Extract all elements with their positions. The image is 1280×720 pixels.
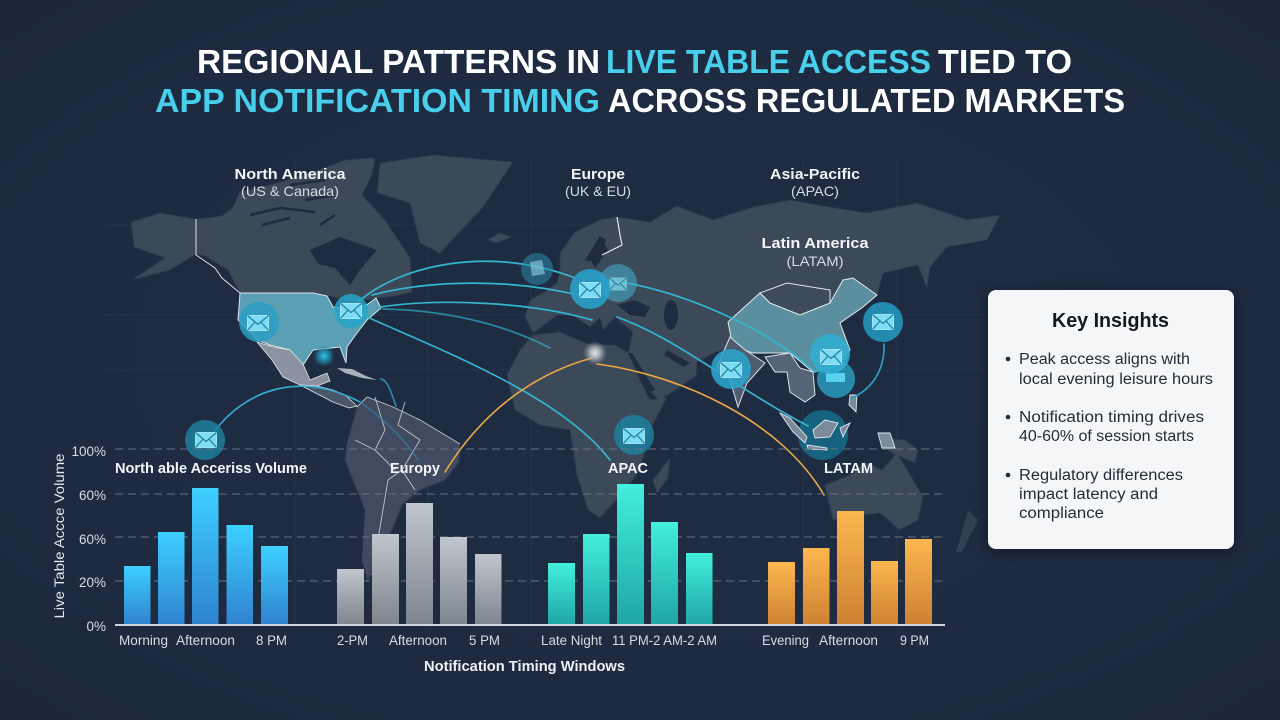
marker: Pacific — [185, 420, 225, 460]
group titles: LATAM — [824, 460, 873, 477]
label: North America: (US & Canada) — [241, 183, 339, 199]
insight 2 — [1006, 409, 1204, 445]
label: Europe — [565, 167, 631, 199]
Scandinavia border — [602, 217, 622, 255]
x axis labels: 2-PM — [337, 633, 368, 648]
insight 1: Peak access aligns with — [1019, 351, 1190, 368]
label: Latin America: (LATAM) — [786, 253, 844, 269]
marker: North Africa glow — [583, 341, 607, 365]
y axis tick labels: 0% — [86, 619, 106, 634]
title: LIVE TABLE ACCESS — [606, 43, 931, 80]
x axis labels: Afternoon — [176, 633, 235, 648]
y axis title: Live Table Accce Volume — [51, 453, 67, 618]
x axis labels: 8 PM — [256, 633, 287, 648]
y axis tick labels — [71, 444, 106, 634]
bars: North America — [124, 488, 288, 625]
arcs: orange to Latin America — [445, 358, 824, 495]
label: Latin America: Latin America — [762, 236, 870, 252]
insight 3: impact latency and — [1019, 486, 1158, 503]
title: APP NOTIFICATION TIMING — [155, 82, 600, 119]
notification markers — [185, 253, 903, 460]
insight 2: Notification timing drives — [1019, 409, 1204, 426]
x axis labels: Morning — [119, 633, 168, 648]
India — [717, 337, 765, 407]
x axis labels: Evening — [762, 633, 809, 648]
x axis labels: Late Night — [541, 633, 602, 648]
marker: China — [810, 334, 850, 374]
arcs: North America to Europe — [214, 261, 610, 460]
label: Asia-Pacific: Asia-Pacific — [770, 167, 860, 183]
x axis title: Notification Timing Windows — [424, 659, 625, 675]
Mongolia — [760, 283, 830, 315]
y axis tick labels: 20% — [79, 575, 106, 590]
insight 1 — [1006, 351, 1213, 388]
marker: East US — [334, 294, 368, 328]
title: ACROSS REGULATED MARKETS — [608, 82, 1125, 119]
x axis labels: 11 PM-2 AM-2 AM — [612, 633, 717, 648]
marker: East Europe — [599, 264, 637, 302]
group titles: North able Acceriss Volume — [115, 460, 307, 477]
Canadian archipelago channels — [250, 180, 335, 225]
Indonesia glow — [798, 410, 848, 460]
insight 3: compliance — [1019, 505, 1104, 522]
x axis labels: 5 PM — [469, 633, 500, 648]
marker: East Africa — [614, 415, 654, 455]
group titles: Europy — [390, 460, 441, 477]
x axis line — [115, 624, 945, 626]
x axis labels: Afternoon — [819, 633, 878, 648]
Alaska border — [196, 219, 240, 293]
marker: UK — [521, 253, 553, 285]
group titles — [115, 460, 873, 477]
world map — [100, 155, 1000, 630]
marker: Gulf glow — [313, 345, 335, 367]
insight 3 — [1006, 467, 1183, 522]
China highlighted — [728, 278, 877, 372]
y axis tick labels: 60% — [79, 488, 106, 503]
marker: Japan — [863, 302, 903, 342]
Caribbean islands — [337, 368, 377, 380]
arcs: Europe to Asia-Pacific — [617, 283, 884, 426]
Mexico — [257, 342, 330, 386]
Central America — [300, 385, 357, 408]
label: Europe: Europe — [571, 167, 625, 183]
bars: Europe — [337, 503, 502, 625]
insight 3: Regulatory differences — [1019, 467, 1183, 484]
panel heading: Key Insights — [1052, 310, 1169, 332]
bars: LATAM — [768, 511, 932, 625]
insight 2: 40-60% of session starts — [1019, 428, 1194, 445]
bar chart — [51, 444, 945, 675]
marker: Central Europe — [570, 269, 610, 309]
marker: India — [711, 349, 751, 389]
label: Latin America — [762, 236, 870, 269]
insight 1: local evening leisure hours — [1019, 371, 1213, 388]
region labels — [234, 167, 870, 269]
label: Europe: (UK & EU) — [565, 183, 631, 199]
x axis labels — [119, 633, 929, 648]
network arcs — [214, 261, 884, 495]
bars: APAC — [548, 484, 712, 625]
y axis tick labels: 60% — [79, 532, 106, 547]
South America borders — [355, 397, 460, 575]
label: North America: North America — [234, 167, 347, 183]
label: Asia-Pacific — [770, 167, 860, 199]
Southeast Asia — [765, 353, 815, 402]
marker: South China lower — [817, 360, 855, 398]
label: Asia-Pacific: (APAC) — [791, 183, 839, 199]
title: REGIONAL PATTERNS IN — [197, 43, 600, 80]
y axis tick labels: 100% — [71, 444, 106, 459]
panel: key insights — [988, 290, 1234, 549]
x axis labels: Afternoon — [389, 633, 447, 648]
Indonesia and islands — [780, 395, 895, 450]
x axis labels: 9 PM — [900, 633, 929, 648]
title — [155, 43, 1125, 119]
label: North America — [234, 167, 347, 199]
USA highlighted — [238, 293, 381, 365]
dark seas — [310, 236, 690, 392]
group titles: APAC — [608, 460, 648, 477]
marker: West US — [239, 302, 279, 342]
title: TIED TO — [938, 43, 1072, 80]
